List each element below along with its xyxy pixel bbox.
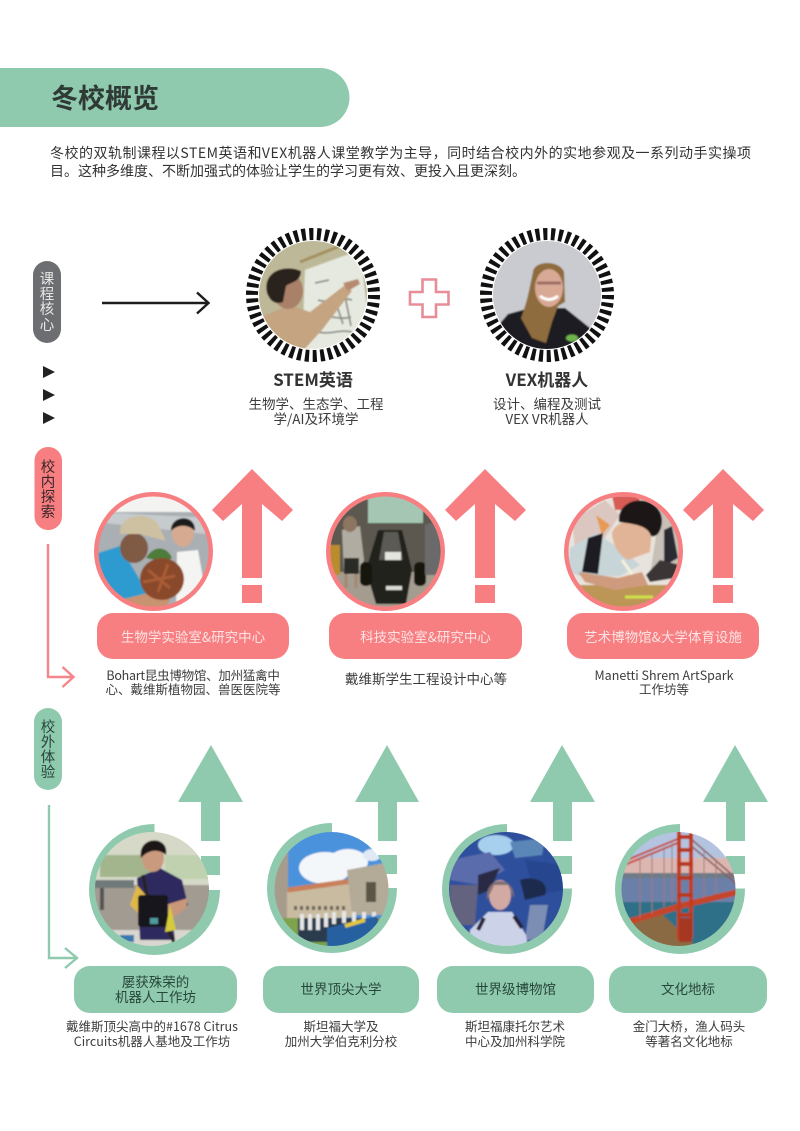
- tag: off-campus experience: 外: [41, 731, 55, 752]
- text: STEM topics: 生物学、生态学、工程: [248, 393, 384, 413]
- tag: course core: [33, 261, 61, 343]
- text: landmarks details: 等著名文化地标: [645, 1031, 733, 1050]
- button: robotics workshop: 屡获殊荣的: [122, 971, 189, 991]
- button: art museum: 艺术博物馆&大学体育设施: [584, 626, 742, 646]
- photo: top universities: [267, 823, 397, 953]
- arrow: off-campus path: [49, 805, 77, 968]
- text: art museum details: Manetti Shrem ArtSpark: [594, 665, 734, 684]
- tag: course core: 核: [40, 298, 54, 319]
- text: robotics workshop details: Circuits机器人基地及工作坊: [74, 1031, 230, 1050]
- arrow: on-campus path: [48, 544, 74, 687]
- text: art museum details: 工作坊等: [639, 679, 689, 698]
- arrow: green up 1: [178, 745, 243, 875]
- button: biology lab: 生物学实验室&研究中心: [121, 626, 266, 646]
- button: robotics workshop: [74, 966, 237, 1013]
- intro paragraph: 目。这种多维度、不断加强式的体验让学生的学习更有效、更投入且更深刻。: [50, 161, 526, 181]
- button: technology lab: [329, 613, 522, 659]
- tag: off-campus experience: 校: [41, 716, 55, 737]
- intro paragraph: [50, 143, 751, 181]
- tag: off-campus experience: 体: [41, 746, 56, 767]
- photo: art museum: [564, 492, 684, 615]
- arrow: green up 4: [703, 745, 768, 874]
- arrow: green up 2: [355, 745, 419, 874]
- arrow: pink up 2: [445, 469, 526, 603]
- arrow: core to courses: [102, 292, 208, 314]
- tag: on-campus exploration: 内: [41, 471, 55, 492]
- tag: on-campus exploration: 校: [41, 456, 55, 477]
- text: museums details: 中心及加州科学院: [465, 1031, 565, 1050]
- text: VEX topics: VEX VR机器人: [505, 408, 589, 428]
- button: world-class museums: [437, 966, 594, 1013]
- text: biology lab details: Bohart昆虫博物馆、加州猛禽中: [106, 665, 280, 684]
- tag: on-campus exploration: 探: [41, 486, 55, 507]
- tag: off-campus experience: [34, 708, 62, 790]
- photo: golden gate bridge: [615, 824, 745, 954]
- button: world-class museums: 世界级博物馆: [475, 978, 556, 998]
- arrow: pink up 1: [212, 469, 293, 603]
- button: biology lab: [97, 613, 289, 659]
- header banner: [0, 68, 350, 127]
- button: robotics workshop: 机器人工作坊: [115, 986, 196, 1006]
- text: technology lab details: 戴维斯学生工程设计中心等: [345, 668, 507, 688]
- button: top universities: [263, 966, 419, 1013]
- tag: course core: 心: [40, 314, 54, 335]
- text: STEM topics: 学/AI及环境学: [274, 408, 358, 428]
- text: landmarks details: 金门大桥，渔人码头: [633, 1016, 745, 1035]
- photo: robotics workshop: [89, 824, 220, 955]
- intro paragraph: 冬校的双轨制课程以STEM英语和VEX机器人课堂教学为主导，同时结合校内外的实地参观及一系列动手实操项: [50, 143, 751, 163]
- text: robotics workshop details: 戴维斯顶尖高中的#1678 Citrus: [66, 1016, 238, 1035]
- heading: VEX robotics: VEX机器人: [505, 366, 588, 391]
- photo: STEM teacher: [252, 234, 374, 356]
- text: museums details: 斯坦福康托尔艺术: [465, 1016, 565, 1035]
- button: technology lab: 科技实验室&研究中心: [360, 626, 491, 646]
- button: cultural landmarks: [609, 966, 767, 1013]
- photo: biology lab: [94, 492, 215, 612]
- text: biology lab details: 心、戴维斯植物园、兽医医院等: [105, 679, 281, 698]
- triple triangle markers: [43, 366, 55, 424]
- button: art museum: [567, 613, 759, 659]
- tag: on-campus exploration: [34, 447, 62, 530]
- text: universities details: 斯坦福大学及: [303, 1016, 379, 1035]
- arrow: green up 3: [530, 745, 595, 874]
- text: VEX topics: 设计、编程及测试: [493, 393, 601, 413]
- photo: technology lab: [326, 492, 445, 612]
- tag: course core: 程: [40, 283, 54, 304]
- photo: world-class museums: [442, 824, 572, 954]
- icon: plus: [410, 280, 448, 317]
- heading: STEM English: STEM英语: [273, 366, 353, 391]
- arrow: pink up 3: [683, 469, 764, 603]
- tag: on-campus exploration: 索: [41, 501, 55, 522]
- text: universities details: 加州大学伯克利分校: [285, 1031, 398, 1050]
- button: top universities: 世界顶尖大学: [300, 978, 382, 998]
- tag: course core: 课: [40, 268, 55, 289]
- button: cultural landmarks: 文化地标: [661, 978, 715, 998]
- photo: VEX teacher: [486, 234, 608, 356]
- title: 冬校概览: [51, 77, 159, 116]
- tag: off-campus experience: 验: [41, 761, 56, 782]
